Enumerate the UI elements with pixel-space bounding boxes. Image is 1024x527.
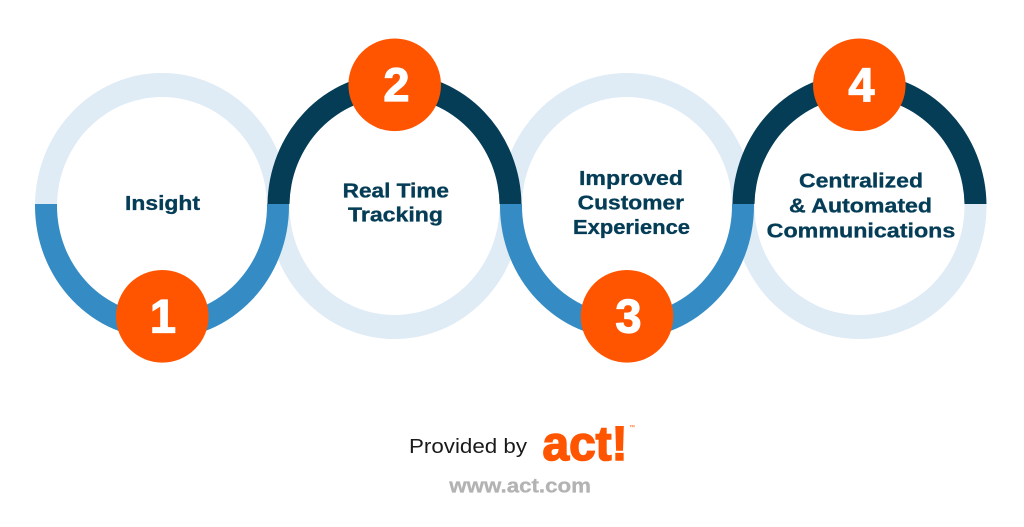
step 4: Centralized & Automated Communications <box>732 38 986 238</box>
logo: act!: act! <box>542 418 628 471</box>
ring 1 blue lower arc <box>35 204 289 331</box>
ring 3 blue lower arc <box>500 204 754 331</box>
label: Real Time Tracking: Tracking <box>348 205 443 227</box>
logo: act!: ™ <box>629 424 635 431</box>
label: Centralized & Automated Communications: & Automated <box>789 195 932 217</box>
footer: website url: www.act.com <box>448 476 591 498</box>
label: Improved Customer Experience: Improved <box>579 168 683 190</box>
step 1: Insight <box>35 194 289 363</box>
label: Real Time Tracking <box>343 180 449 227</box>
label: Improved Customer Experience <box>573 168 690 239</box>
badge 2: 2 <box>383 58 410 111</box>
pale background arcs of all four rings <box>35 73 986 339</box>
badge 1: 1 <box>150 290 176 343</box>
badge 4 <box>813 39 906 131</box>
label: Improved Customer Experience: Customer <box>578 193 684 215</box>
step 2: Real Time Tracking <box>268 38 522 226</box>
ring 4 dark upper arc <box>732 82 986 204</box>
label: Centralized & Automated Communications <box>767 171 955 242</box>
badge 3 <box>581 270 673 363</box>
ring 2 dark upper arc <box>268 82 522 204</box>
badge 3: 3 <box>615 290 642 343</box>
badge 1 <box>116 270 209 363</box>
label: Real Time Tracking: Real Time <box>343 180 449 202</box>
label: Insight: Insight <box>125 193 200 215</box>
badge 2 <box>348 39 441 131</box>
badge 4: 4 <box>848 58 875 111</box>
step 3: Improved Customer Experience <box>500 170 754 363</box>
label: Centralized & Automated Communications: Communications <box>767 220 955 242</box>
label: Improved Customer Experience: Experience <box>573 217 690 239</box>
footer: provided by: Provided by <box>409 435 528 458</box>
label: Centralized & Automated Communications: Centralized <box>799 171 923 193</box>
